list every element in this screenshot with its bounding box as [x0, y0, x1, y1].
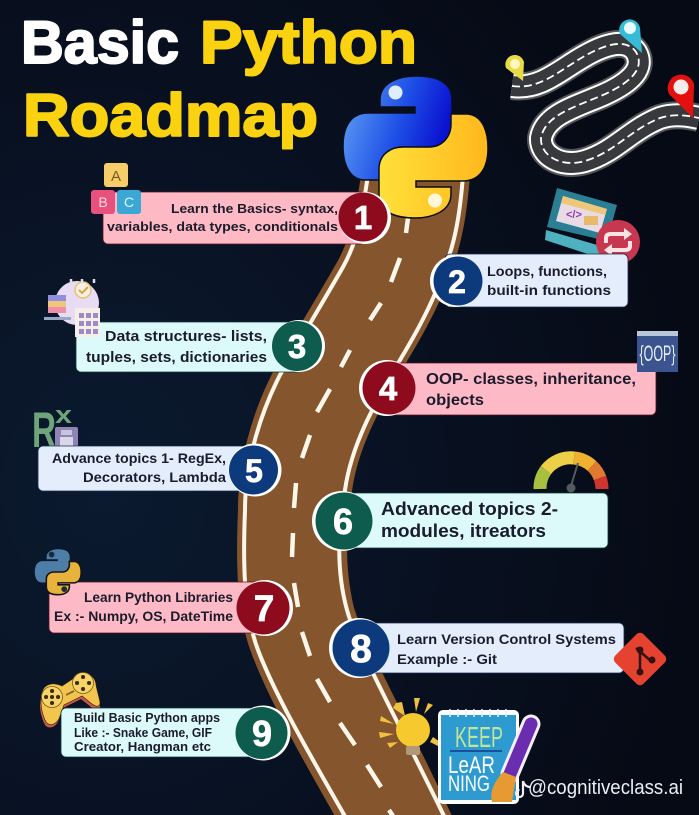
icon: ABC blocks: B	[98, 194, 108, 210]
icon: light bulb	[379, 698, 440, 755]
badge 3: 3	[288, 328, 306, 365]
icon: keep learning notebook: LeAR	[448, 752, 495, 779]
text 9: Like :- Snake Game, GIF	[74, 726, 212, 740]
text 9: Build Basic Python apps	[74, 711, 220, 725]
icon: regex floppy: R	[32, 402, 56, 458]
icon: keep learning notebook: KEEP	[455, 722, 503, 754]
text 3: tuples, sets, dictionaries	[86, 349, 267, 366]
text 2: Loops, functions,	[487, 263, 607, 279]
text 8	[397, 631, 616, 667]
icon: gamepad	[40, 672, 100, 727]
step 4	[359, 331, 678, 416]
text 1: Learn the Basics- syntax,	[171, 201, 338, 216]
title	[21, 9, 417, 149]
badge 5: 5	[245, 453, 263, 489]
text 3: Data structures- lists,	[105, 328, 267, 345]
text 1	[107, 201, 338, 234]
badge 4	[359, 360, 416, 416]
text 6: modules, itreators	[381, 521, 546, 541]
text 5: Decorators, Lambda	[83, 469, 226, 485]
title: Basic	[21, 9, 179, 76]
card 2	[445, 254, 628, 307]
text 6: Advanced topics 2-	[381, 499, 558, 519]
icon: keep learning notebook: NING	[448, 771, 490, 796]
icon: OOP window	[637, 331, 678, 372]
badge 9: 9	[252, 713, 272, 754]
card 8	[350, 623, 624, 673]
text 3	[86, 328, 267, 366]
text 4	[426, 371, 636, 409]
icon: laptop with sync	[545, 188, 640, 264]
badge 6: 6	[333, 501, 353, 542]
text 8: Learn Version Control Systems	[397, 631, 616, 647]
badge 1	[338, 192, 391, 244]
icon: keep learning notebook	[438, 709, 531, 804]
icon: data structures	[44, 279, 100, 337]
step 3	[44, 279, 325, 372]
step 9	[40, 672, 290, 760]
icon: ABC blocks: A	[111, 168, 121, 185]
badge 2: 2	[448, 264, 466, 300]
icon: winding road with pins	[505, 19, 699, 163]
icon: small python logo	[35, 549, 81, 595]
icon: laptop with sync: </>	[566, 209, 582, 221]
text 2: built-in functions	[487, 282, 611, 298]
text 7: Learn Python Libraries	[84, 589, 233, 605]
step 6	[312, 458, 608, 551]
main brown road	[237, 175, 470, 815]
icon: gauge	[540, 458, 602, 491]
text 4: OOP- classes, inheritance,	[426, 371, 636, 388]
step 5	[32, 402, 282, 496]
badge 2	[430, 255, 482, 307]
icon: regex floppy: x	[55, 402, 73, 429]
text 8: Example :- Git	[397, 651, 497, 667]
text 9	[74, 711, 220, 754]
text 1: variables, data types, conditionals	[107, 219, 338, 234]
badge 8: 8	[350, 628, 372, 671]
card 5	[38, 446, 253, 491]
step 8	[329, 618, 668, 687]
watermark: @cognitiveclass.ai	[528, 777, 683, 799]
text 2	[487, 263, 611, 298]
text 5: Advance topics 1- RegEx,	[52, 450, 226, 466]
icon: python logo	[343, 76, 488, 218]
text 5	[52, 450, 226, 485]
icon: git logo	[612, 631, 668, 687]
step 2	[430, 188, 640, 307]
text 7: Ex :- Numpy, OS, DateTime	[54, 608, 233, 624]
badge 3	[272, 320, 325, 372]
card 1	[103, 192, 365, 244]
card 3	[76, 322, 301, 372]
badge 1: 1	[354, 199, 372, 236]
title: Roadmap	[23, 82, 318, 149]
card 7	[49, 582, 271, 633]
badge 7	[236, 580, 293, 636]
badge 8	[329, 618, 390, 678]
icon: ABC blocks	[91, 163, 141, 214]
text 7	[54, 589, 233, 624]
text 4: objects	[426, 392, 484, 409]
title: Python	[200, 9, 417, 76]
badge 4: 4	[379, 370, 398, 407]
badge 5	[228, 444, 282, 496]
text 9: Creator, Hangman etc	[74, 740, 211, 754]
text 6	[381, 499, 558, 541]
card 9	[61, 708, 263, 757]
badge 7: 7	[254, 588, 274, 629]
icon: ABC blocks: C	[124, 194, 134, 210]
step 7	[35, 549, 293, 636]
card 6	[340, 493, 608, 548]
card 4	[385, 363, 656, 415]
step 1	[91, 163, 391, 244]
badge 6	[312, 491, 372, 551]
badge 9	[236, 706, 290, 760]
